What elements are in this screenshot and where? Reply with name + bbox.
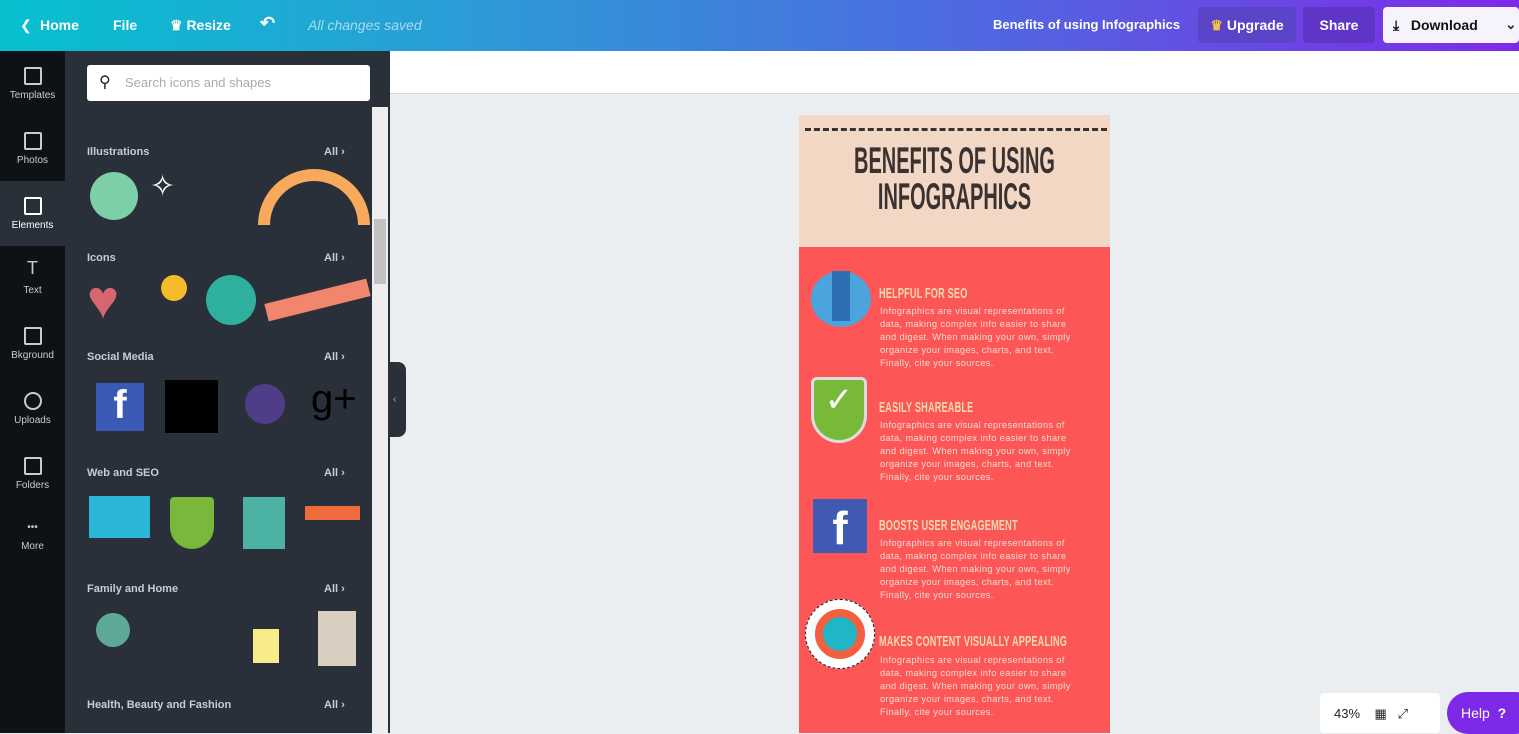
scrollbar <box>372 107 388 733</box>
search box: ⚲ <box>99 74 111 91</box>
item: engagement: data, making complex info easier to share <box>880 551 1066 561</box>
elements panel <box>65 51 390 733</box>
elements panel: Illustrations <box>87 146 149 158</box>
top bar: Benefits of using Infographics <box>993 17 1180 32</box>
top bar: ↶ <box>260 13 275 33</box>
elements panel: Social Media <box>87 351 154 363</box>
item: shareable: and digest. When making your own, simply <box>880 446 1071 456</box>
search box: Search icons and shapes <box>125 75 271 90</box>
elements panel: Health, Beauty and Fashion <box>87 699 231 711</box>
item: shareable: EASILY SHAREABLE <box>879 399 973 416</box>
elements panel: ✧ <box>150 170 175 203</box>
item: seo: data, making complex info easier to share <box>880 319 1066 329</box>
elements panel: All › <box>324 467 345 479</box>
sidebar tabs: More <box>21 541 44 552</box>
help button <box>1447 692 1519 734</box>
title <box>854 140 1055 217</box>
sidebar tabs: Text <box>23 285 42 296</box>
sidebar tabs: ••• <box>27 522 38 533</box>
top bar: Upgrade <box>1227 17 1284 33</box>
item: seo: Finally, cite your sources. <box>880 358 994 368</box>
icon: facebook: f <box>832 502 848 554</box>
top bar <box>0 0 1519 51</box>
sidebar tabs: Photos <box>17 155 48 166</box>
item: engagement: and digest. When making your own, simply <box>880 564 1071 574</box>
sidebar tabs: Uploads <box>14 415 51 426</box>
top bar: Share <box>1320 17 1358 33</box>
item: shareable: data, making complex info easier to share <box>880 433 1066 443</box>
top bar: ⌄ <box>1505 16 1517 32</box>
canvas white bar <box>390 51 1519 94</box>
item: shareable: organize your images, charts, and text. <box>880 459 1054 469</box>
item: visual: organize your images, charts, and text. <box>880 694 1054 704</box>
item: visual <box>805 599 1071 717</box>
item: shareable: Infographics are visual representations of <box>880 420 1065 430</box>
item: visual: MAKES CONTENT VISUALLY APPEALING <box>879 633 1067 650</box>
elements panel: All › <box>324 699 345 711</box>
elements panel: All › <box>324 351 345 363</box>
header <box>799 115 1110 247</box>
elements panel: Web and SEO <box>87 467 159 479</box>
item: seo: organize your images, charts, and text. <box>880 345 1054 355</box>
sidebar tabs <box>0 51 65 733</box>
elements panel: ♥ <box>87 270 119 330</box>
item: seo: and digest. When making your own, simply <box>880 332 1071 342</box>
title: INFOGRAPHICS <box>878 176 1031 217</box>
item: seo: HELPFUL FOR SEO <box>879 285 967 302</box>
item: visual: Infographics are visual representations of <box>880 655 1065 665</box>
elements panel: All › <box>324 146 345 158</box>
top bar: File <box>113 17 137 33</box>
search box <box>87 65 370 101</box>
sidebar tabs: T <box>27 258 38 278</box>
elements panel: Family and Home <box>87 583 178 595</box>
item: shareable <box>811 377 1071 482</box>
sidebar tabs: Elements <box>12 220 53 231</box>
item: visual: and digest. When making your own, simply <box>880 681 1071 691</box>
top bar: ♛ Resize <box>170 17 231 33</box>
item: shareable: Finally, cite your sources. <box>880 472 994 482</box>
elements panel: g+ <box>311 377 357 421</box>
item: seo <box>811 271 1071 368</box>
item: visual: Finally, cite your sources. <box>880 707 994 717</box>
elements panel: All › <box>324 252 345 264</box>
collapse handle <box>390 362 406 437</box>
icon: shield <box>811 377 867 443</box>
top bar: All changes saved <box>308 17 422 33</box>
item: engagement: BOOSTS USER ENGAGEMENT <box>879 517 1018 534</box>
top bar: ⤓ Download <box>1393 16 1478 32</box>
item: engagement: Finally, cite your sources. <box>880 590 994 600</box>
zoom control: 43% ▦ ⤢ <box>1334 706 1408 721</box>
item: visual: data, making complex info easier to share <box>880 668 1066 678</box>
item: engagement <box>813 499 1071 600</box>
elements panel: All › <box>324 583 345 595</box>
icon: facebook <box>813 499 867 553</box>
icon: people bubble <box>811 271 871 327</box>
help button: Help ? <box>1461 705 1506 721</box>
icon: eye <box>805 599 875 669</box>
collapse handle: ‹ <box>393 394 396 405</box>
elements panel: Icons <box>87 252 116 264</box>
infographic <box>799 115 1110 733</box>
sidebar tabs: Bkground <box>11 350 54 361</box>
icon: shield: ✓ <box>825 381 853 419</box>
elements panel: f <box>113 383 127 427</box>
top bar: ♛ <box>1210 16 1223 32</box>
sidebar tabs: Folders <box>16 480 49 491</box>
top bar: ❮ <box>20 17 32 33</box>
item: seo: Infographics are visual representations of <box>880 306 1065 316</box>
sidebar tabs: Templates <box>10 90 55 101</box>
top bar: Home <box>40 17 79 33</box>
item: engagement: Infographics are visual representations of <box>880 538 1065 548</box>
title: BENEFITS OF USING <box>854 140 1055 181</box>
zoom control <box>1320 693 1440 733</box>
item: engagement: organize your images, charts, and text. <box>880 577 1054 587</box>
